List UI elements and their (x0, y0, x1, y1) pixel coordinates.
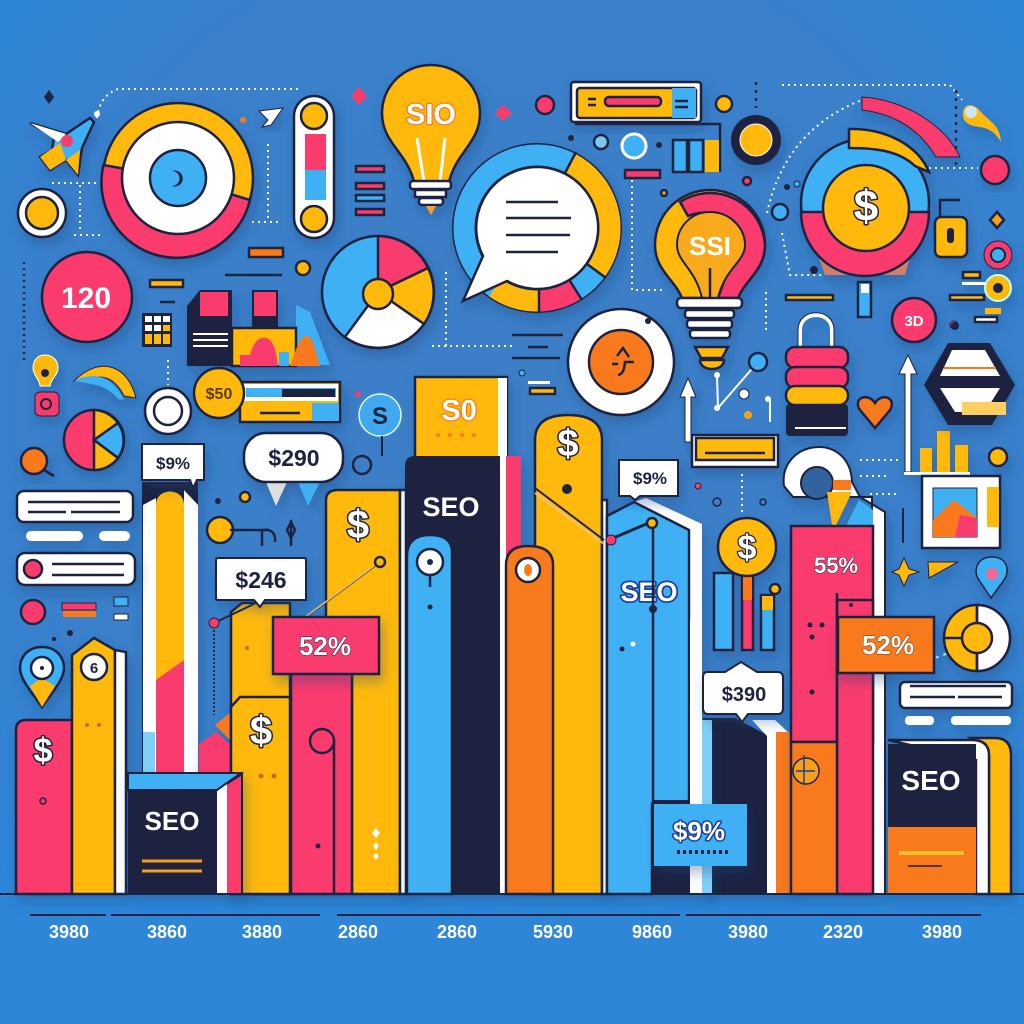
coin card: $50: $50 (206, 386, 232, 403)
orange bar (506, 546, 553, 894)
navy divider line (333, 740, 335, 894)
trend nodes (606, 518, 657, 605)
label: 52% orange: 52% (862, 630, 914, 660)
icon: yellow comet (963, 105, 1001, 142)
marks on pink panel (808, 603, 853, 694)
icon: rainbow arc (74, 366, 136, 400)
label: $9% blue: $9% (673, 816, 725, 846)
SEO label on blue bar: SEO (620, 577, 678, 607)
coin card: $50 (194, 368, 340, 422)
x axis labels: 2860 (338, 922, 378, 942)
x axis labels: 3880 (242, 922, 282, 942)
white arch (784, 447, 885, 894)
icon: arrow cursor (259, 108, 283, 127)
coin with mini bars (714, 518, 780, 650)
small pink peak (199, 732, 231, 772)
icon: light bulb SIO (382, 65, 480, 215)
blue bar (407, 535, 452, 894)
icon: mini pie (64, 410, 124, 470)
gauge with dollar: $ (854, 182, 878, 231)
callout: $9% (142, 444, 204, 488)
badge on yellow bar (40, 654, 107, 804)
label: 52% pink (273, 617, 379, 674)
image card (922, 476, 1000, 548)
x axis labels: 3980 (922, 922, 962, 942)
navy bar (405, 456, 500, 894)
mini dashboard with hills (187, 290, 330, 366)
small orange peak (215, 712, 231, 741)
SO label: S0 (441, 395, 477, 427)
label: 52% orange (838, 617, 934, 673)
small bar marks (620, 605, 657, 652)
label: $9% blue (654, 804, 747, 866)
tall bar with cap (142, 482, 198, 772)
callout: $246 (216, 558, 306, 607)
x axis labels: 9860 (632, 922, 672, 942)
icon: vertical capsule (294, 96, 334, 238)
SO label (436, 395, 477, 437)
gauge with dollar (801, 97, 960, 276)
icon: map pin (20, 647, 64, 707)
trend line (209, 557, 385, 715)
sky wedge behind arch (846, 500, 873, 526)
callout: $390: $390 (722, 684, 766, 706)
callout: $290 (244, 433, 343, 506)
icon: pink ball (981, 156, 1009, 184)
callout: $290: $290 (268, 445, 320, 471)
SEO box (128, 773, 242, 894)
icon: heart (858, 397, 892, 428)
pink lower bar (837, 600, 873, 894)
donut target chart (101, 103, 253, 258)
baseline (0, 893, 1024, 895)
bar: white side strip (115, 650, 126, 894)
pink strip (506, 456, 521, 556)
stat circle: 120: 120 (61, 282, 111, 315)
callout: $9%: $9% (156, 454, 190, 473)
icon: white ring (145, 388, 191, 434)
white side of SO box (498, 378, 507, 458)
x axis labels: 2320 (823, 922, 863, 942)
label 55%: 55% (814, 553, 858, 578)
icon: calculator grid (142, 313, 172, 347)
right pink/orange bars (784, 447, 885, 894)
center bars group (405, 377, 607, 894)
white text rows (17, 491, 135, 585)
yellow front bar (231, 697, 290, 894)
icon: yellow padlock (935, 200, 967, 257)
pink stat dot (892, 298, 936, 342)
yellow back bar (231, 603, 290, 894)
SEO box: SEO (145, 806, 199, 836)
small dots cluster (536, 96, 958, 329)
navy bar with chamfer (703, 718, 792, 894)
arrow with yellow card (680, 378, 778, 467)
icon: light bulb SSI (655, 190, 765, 369)
node line graph (714, 353, 771, 422)
white strip (400, 490, 406, 894)
callout: $246: $246 (235, 567, 287, 593)
chart bar group: left (16, 638, 126, 894)
bar marks (245, 503, 380, 860)
icon: light bulb SIO: SIO (406, 99, 456, 131)
x axis labels (49, 922, 962, 942)
pink panel (791, 526, 873, 742)
small blue tag and dashes (512, 282, 871, 394)
mini bar chart in frame (575, 124, 720, 172)
badge on yellow bar: 6 (90, 660, 98, 677)
SEO card right: SEO (901, 765, 961, 796)
x axis rule (30, 914, 981, 916)
x axis labels: 2860 (437, 922, 477, 942)
connector pins (207, 456, 371, 546)
tall blue chamfered bar (607, 498, 712, 894)
orange lower bar (791, 742, 837, 894)
SEO card right (888, 738, 1011, 894)
bar: pink (16, 720, 72, 894)
callout: $390 (703, 662, 783, 722)
dollar sign on pink bar: $ (34, 732, 53, 770)
callout: $9% top (619, 460, 678, 500)
bar: yellow capped (72, 638, 115, 894)
tall yellow bar (535, 415, 602, 894)
callout: $9% top: $9% (633, 469, 667, 488)
x axis labels: 3980 (49, 922, 89, 942)
center-left bars group (199, 490, 406, 894)
x axis labels: 3860 (147, 922, 187, 942)
icon: orange magnifier (21, 448, 54, 476)
white strip (602, 500, 607, 894)
icon: blue S disc (355, 391, 401, 456)
small legend bars (44, 87, 512, 302)
coin with mini bars: $ (738, 529, 757, 567)
compass icon (793, 755, 819, 785)
arch wedge (827, 492, 852, 525)
icon: rocket (30, 111, 100, 175)
icon: small yellow ring (18, 189, 66, 237)
orange target (568, 309, 674, 415)
dial pie (944, 605, 1010, 671)
small star and triangle icons (892, 557, 1007, 598)
decorative dotted connector lines (24, 82, 978, 660)
pink stat dot: 3D (904, 313, 924, 330)
icon: hexagon (924, 343, 1015, 425)
bar marks: $ (347, 503, 369, 547)
diagonal connector (535, 488, 604, 544)
small legend swatches (21, 597, 128, 641)
arrow and bar chart (899, 355, 1007, 475)
icon: blue S disc: S (372, 403, 388, 430)
badges on center bars: $ (557, 423, 579, 465)
icon: navy ring (731, 115, 781, 165)
icon: light bulb SSI: SSI (689, 231, 731, 261)
icon: small lamp and pin (33, 355, 59, 416)
white text rows right (900, 682, 1012, 725)
icon: stacked padlock (786, 313, 848, 436)
label: 52% pink: 52% (299, 631, 351, 661)
pink bar (291, 660, 352, 894)
small side icons (950, 241, 1012, 330)
top banner (571, 82, 701, 122)
badges on center bars (417, 423, 579, 610)
scattered marks (695, 460, 903, 543)
x axis labels: 5930 (533, 922, 573, 942)
tall yellow bar (326, 490, 400, 894)
speech bubble donut (452, 143, 622, 313)
yellow SO box (415, 377, 507, 467)
stat circle: 120 (42, 252, 132, 342)
pie chart (322, 236, 434, 348)
bar marks: $ (250, 709, 272, 753)
SEO label on navy bar: SEO (422, 492, 480, 522)
x axis labels: 3980 (728, 922, 768, 942)
icon: diamond marker (990, 212, 1004, 228)
